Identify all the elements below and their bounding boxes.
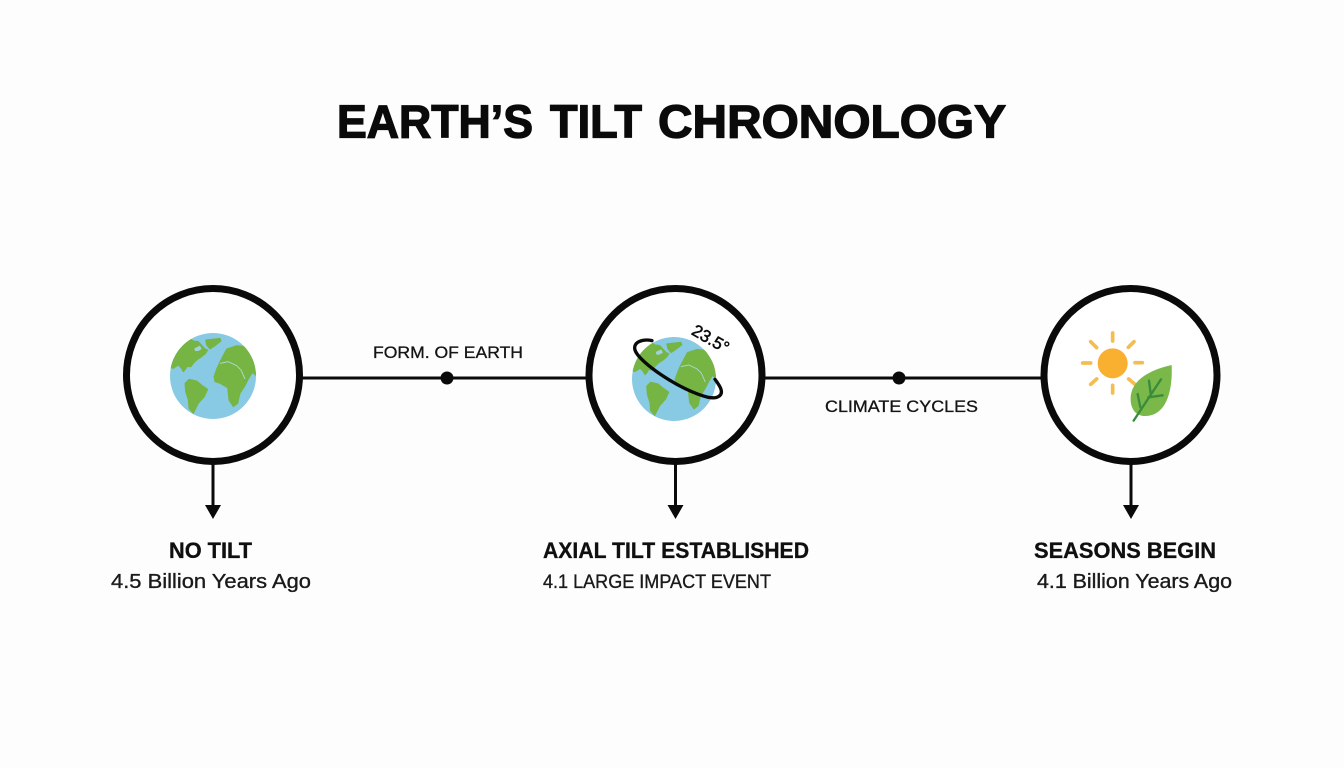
timeline connector: axial tilt to seasons bbox=[762, 372, 1045, 384]
connector label: climate cycles: CLIMATE CYCLES bbox=[825, 397, 978, 416]
leaf bbox=[1131, 365, 1172, 421]
arrow: no tilt bbox=[205, 462, 221, 519]
milestone text: no tilt: NO TILT bbox=[169, 538, 253, 563]
milestone text: axial tilt established: AXIAL TILT ESTABLISHED bbox=[543, 538, 809, 563]
tilt angle label: 23.5° bbox=[688, 321, 733, 357]
icon: sun and leaf bbox=[1083, 333, 1172, 421]
milestone text: axial tilt established bbox=[543, 538, 809, 593]
title: TILT bbox=[550, 96, 642, 148]
sun bbox=[1083, 333, 1142, 393]
title bbox=[337, 96, 1006, 148]
title: EARTH’S bbox=[337, 96, 533, 148]
timeline connector: no tilt to axial tilt bbox=[300, 372, 590, 384]
arrow: axial tilt bbox=[668, 462, 684, 519]
orbit ring bbox=[635, 340, 721, 398]
title: CHRONOLOGY bbox=[658, 96, 1006, 148]
milestone circle: no tilt bbox=[126, 288, 300, 462]
milestone text: no tilt bbox=[111, 538, 311, 593]
milestone circle: axial tilt bbox=[589, 288, 762, 462]
milestone text: no tilt: 4.5 Billion Years Ago bbox=[111, 570, 311, 593]
milestone text: seasons begin bbox=[1034, 538, 1232, 593]
connector label: form. of earth: FORM. OF EARTH bbox=[373, 343, 523, 362]
icon: globe without tilt bbox=[170, 333, 257, 419]
milestone text: axial tilt established: 4.1 LARGE IMPACT EVENT bbox=[543, 571, 771, 593]
milestone text: seasons begin: SEASONS BEGIN bbox=[1034, 538, 1216, 563]
milestone text: seasons begin: 4.1 Billion Years Ago bbox=[1037, 570, 1232, 593]
arrow: seasons bbox=[1123, 462, 1139, 519]
icon: tilted globe with orbit ring bbox=[632, 337, 721, 421]
milestone circle: seasons bbox=[1044, 288, 1217, 462]
